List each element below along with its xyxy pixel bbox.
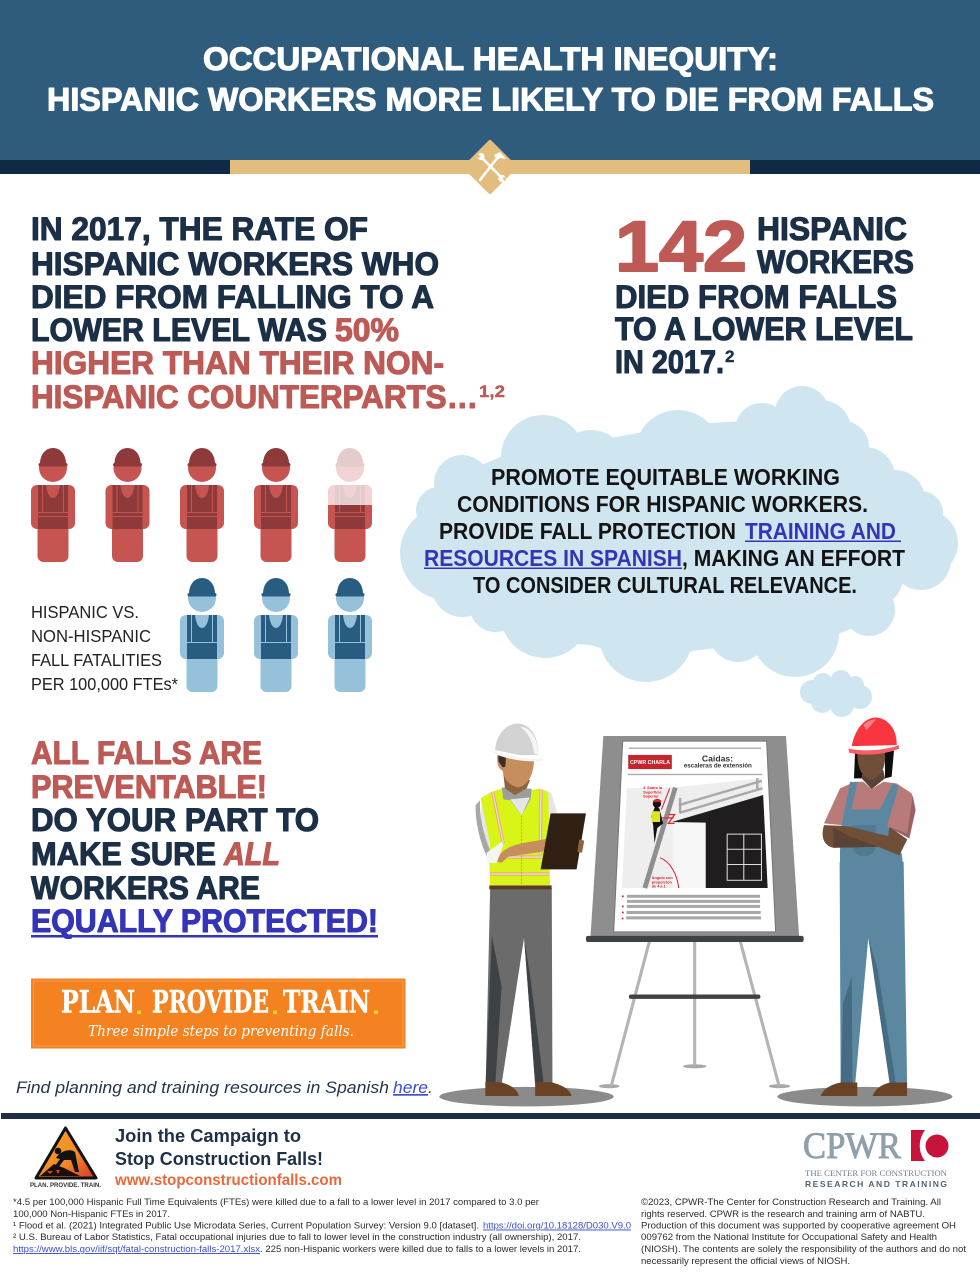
campaign text: www.stopconstructionfalls.com xyxy=(114,1172,342,1189)
poster: Caidas extension ladders: Superior xyxy=(643,795,659,799)
left worker with clipboard xyxy=(476,723,586,1096)
headline: rate 50 percent higher: HIGHER THAN THEIR NON- xyxy=(31,345,444,381)
poster: Caidas extension ladders: escaleras de extensión xyxy=(684,763,752,770)
pictogram label: NON-HISPANIC xyxy=(31,626,151,646)
campaign text xyxy=(114,1126,342,1189)
easel xyxy=(586,736,804,1086)
headline: rate 50 percent higher: IN 2017, THE RATE OF xyxy=(31,211,368,247)
poster: Caidas extension ladders: Ángulo con xyxy=(652,875,673,880)
statistic: 142 Hispanic workers: DIED FROM FALLS xyxy=(615,279,897,315)
call to action headline: EQUALLY PROTECTED! xyxy=(31,903,378,939)
copyright notice: Production of this document was supported by cooperative agreement OH xyxy=(641,1220,956,1230)
header banner xyxy=(0,0,980,192)
headline: rate 50 percent higher: 50% xyxy=(335,312,399,348)
orange banner: plan provide train: Three simple steps to preventing falls. xyxy=(88,1024,354,1040)
orange banner: plan provide train: PROVIDE xyxy=(152,984,269,1020)
copyright notice: 009762 from the National Institute for Occupational Safety and Health xyxy=(641,1231,937,1242)
title xyxy=(47,41,934,118)
poster: Caidas extension ladders: proporción xyxy=(652,880,673,884)
footnotes and sources: https://www.bls.gov/iif/sqt/fatal-construction-falls-2017.xlsx xyxy=(13,1243,260,1254)
copyright notice: (NIOSH). The contents are solely the responsibility of the authors and do not xyxy=(641,1243,966,1254)
title: HISPANIC WORKERS MORE LIKELY TO DIE FROM FALLS xyxy=(47,82,934,118)
statistic: 142 Hispanic workers: HISPANIC xyxy=(757,211,907,247)
copyright notice: rights reserved. CPWR is the research and training arm of NABTU. xyxy=(641,1208,925,1219)
cloud message text: CONDITIONS FOR HISPANIC WORKERS. xyxy=(457,491,868,517)
cloud message text: , MAKING AN EFFORT xyxy=(682,545,905,571)
statistic: 142 Hispanic workers: 2 xyxy=(725,347,734,366)
pictogram: non-Hispanic fatalities, 3 workers xyxy=(180,578,372,692)
orange banner: plan provide train: TRAIN xyxy=(283,984,370,1020)
footnotes and sources: ² U.S. Bureau of Labor Statistics, Fatal occupational injuries due to fall to lower level in the construction industry (all ownership), 2017. xyxy=(13,1231,581,1242)
upper body xyxy=(823,717,916,867)
poster: Caidas extension ladders: de 4 a 1 xyxy=(652,885,666,889)
cloud message text: TO CONSIDER CULTURAL RELEVANCE. xyxy=(473,572,857,598)
footnotes and sources: . 225 non-Hispanic workers were killed due to falls to a lower levels in 2017. xyxy=(260,1243,581,1254)
campaign text: Stop Construction Falls! xyxy=(115,1149,323,1169)
CPWR logo: THE CENTER FOR CONSTRUCTION xyxy=(805,1168,947,1178)
copyright notice: necessarily represent the official views of NIOSH. xyxy=(641,1255,850,1266)
call to action headline: ALL FALLS ARE xyxy=(31,735,262,771)
footnotes and sources xyxy=(13,1196,631,1254)
footnotes and sources: ¹ Flood et al. (2021) Integrated Public Use Microdata Series, Current Population Survey: Version 9.0 [dataset]. xyxy=(13,1220,479,1230)
CPWR logo: CPWR xyxy=(803,1126,901,1167)
pictogram label: FALL FATALITIES xyxy=(31,650,162,670)
poster: Caidas extension ladders: Superficie xyxy=(643,790,661,794)
statistic: 142 Hispanic workers: WORKERS xyxy=(757,244,914,280)
statistic: 142 Hispanic workers: 142 xyxy=(615,208,747,287)
cloud message text: PROMOTE EQUITABLE WORKING xyxy=(491,464,840,490)
planning resources link line: . xyxy=(428,1078,433,1097)
pictogram label xyxy=(31,602,178,694)
call to action headline: MAKE SURE xyxy=(31,836,216,872)
pictogram: Hispanic fatalities, 4.5 workers xyxy=(31,445,375,562)
upper body xyxy=(476,723,586,889)
call to action headline: WORKERS ARE xyxy=(31,870,260,906)
footnotes and sources: https://doi.org/10.18128/D030.V9.0 xyxy=(483,1220,631,1230)
cloud message text: RESOURCES IN SPANISH xyxy=(424,545,682,571)
headline: rate 50 percent higher: HISPANIC WORKERS WHO xyxy=(31,246,439,282)
small thought bubble xyxy=(800,670,872,717)
icon: crossed hammer and wrench on diamond xyxy=(465,142,515,192)
pictogram label: PER 100,000 FTEs* xyxy=(31,674,178,694)
headline: rate 50 percent higher: LOWER LEVEL WAS xyxy=(31,312,327,348)
campaign logo: worker triangle: PLAN. PROVIDE. TRAIN. xyxy=(30,1182,101,1189)
title: OCCUPATIONAL HEALTH INEQUITY: xyxy=(203,41,778,77)
copyright notice xyxy=(641,1196,966,1266)
orange banner: plan provide train xyxy=(31,978,406,1048)
footer divider bar xyxy=(1,1113,980,1119)
orange banner: plan provide train: PLAN xyxy=(61,984,135,1020)
shadows xyxy=(439,1064,952,1106)
call to action headline: ALL xyxy=(223,836,280,872)
statistic: 142 Hispanic workers: IN 2017. xyxy=(615,344,724,380)
poster: Caidas extension ladders: CPWR CHARLA xyxy=(630,760,670,766)
headline: rate 50 percent higher xyxy=(31,211,505,415)
planning resources link line: here xyxy=(393,1078,428,1097)
headline: rate 50 percent higher: 1,2 xyxy=(479,382,505,401)
CPWR logo: RESEARCH AND TRAINING xyxy=(805,1179,947,1189)
statistic: 142 Hispanic workers: TO A LOWER LEVEL xyxy=(615,311,913,347)
thought cloud with message xyxy=(400,386,958,682)
pictogram label: HISPANIC VS. xyxy=(31,602,139,622)
right worker with arms crossed xyxy=(821,717,916,1096)
poster: Caidas extension ladders xyxy=(614,741,776,932)
planning resources link line: Find planning and training resources in Spanish xyxy=(16,1078,389,1097)
CPWR logo xyxy=(803,1126,948,1189)
headline: rate 50 percent higher: DIED FROM FALLING TO A xyxy=(31,279,434,315)
illustration: workers with easel xyxy=(439,717,952,1106)
call to action headline: DO YOUR PART TO xyxy=(31,802,319,838)
poster: Caidas extension ladders: Caídas: xyxy=(702,753,733,763)
cloud message text: PROVIDE FALL PROTECTION xyxy=(439,518,736,544)
headline: rate 50 percent higher: HISPANIC COUNTERPARTS… xyxy=(31,379,478,415)
cloud message text xyxy=(424,464,905,598)
cloud message text: TRAINING AND xyxy=(745,518,896,544)
campaign text: Join the Campaign to xyxy=(115,1126,301,1146)
call to action headline: PREVENTABLE! xyxy=(31,769,267,805)
statistic: 142 Hispanic workers xyxy=(615,208,914,380)
campaign logo: worker triangle xyxy=(30,1128,101,1189)
footnotes and sources: *4.5 per 100,000 Hispanic Full Time Equivalents (FTEs) were killed due to a fall to a lower level in 2017 compared to 3.0 per xyxy=(13,1196,539,1207)
copyright notice: ©2023, CPWR-The Center for Construction Research and Training. All xyxy=(641,1196,941,1207)
footnotes and sources: 100,000 Non-Hispanic FTEs in 2017. xyxy=(13,1208,170,1219)
poster: Caidas extension ladders: 3' Sobre la xyxy=(643,786,663,790)
call to action headline xyxy=(31,735,378,939)
